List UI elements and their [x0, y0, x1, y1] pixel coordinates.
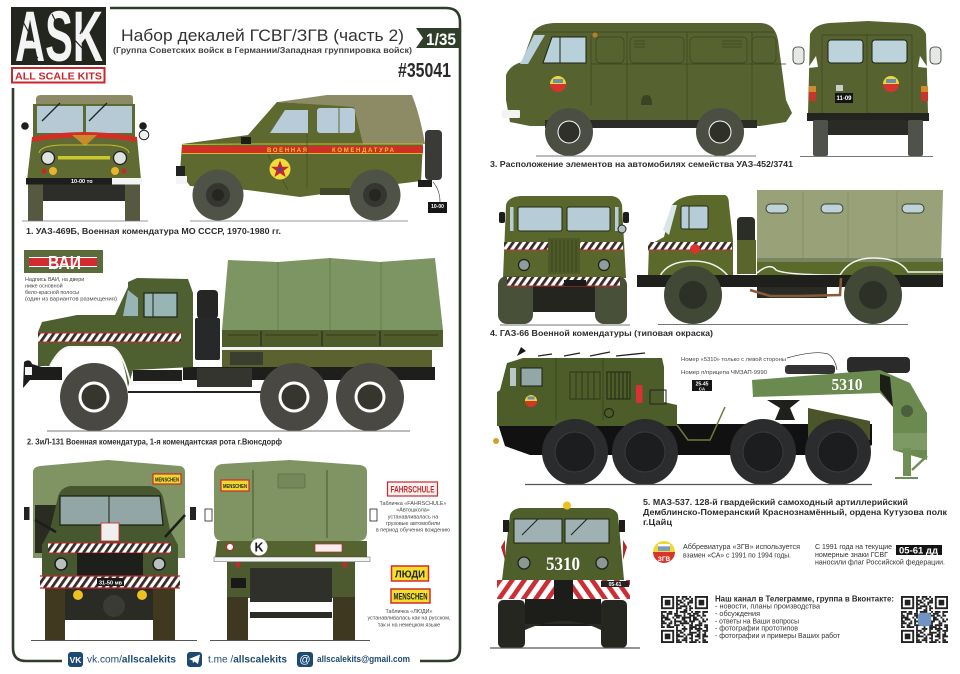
note: VAI: бело-красной полосы	[25, 289, 79, 296]
Telegram and VK text: - фотографии и примеры Ваших работ	[715, 632, 841, 640]
title: Набор декалей ГСВГ/ЗГВ (часть 2)	[121, 27, 404, 45]
sign: MENSCHEN: MENSCHEN	[394, 592, 428, 602]
vehicle 4: GAZ-66 front view	[498, 196, 630, 325]
link: email: allscalekits@gmail.com	[317, 654, 410, 664]
note: VAI: ниже основной	[25, 282, 63, 290]
QR code: Telegram	[661, 597, 708, 642]
logo: ASK: ASK	[15, 0, 103, 77]
note: 1991 plates: номерные знаки ГСВГ	[815, 552, 888, 559]
vehicle 1: UAZ-469 side view: 10-00	[431, 204, 444, 210]
caption 5: 5. МАЗ-537. 128-й гвардейский самоходный артиллерийский	[643, 497, 908, 507]
note: 1991 plates	[815, 544, 945, 566]
vehicle 1: UAZ-469 front view: 10-00 то	[71, 179, 93, 185]
icon: email: @	[299, 654, 311, 666]
note: 1991 plates: наносили флаг Российской федерации.	[815, 558, 945, 566]
vehicle 3: UAZ-452 rear view	[793, 21, 941, 156]
sign: VAI: ВАИ	[48, 253, 81, 273]
caption 1: 1. УАЗ-469Б, Военная комендатура МО СССР, 1970-1980 гг.	[26, 226, 281, 236]
note: VAI: Надпись ВАИ, на двери	[25, 277, 84, 283]
vehicle 2: ZIL-131 front view: MENSCHEN	[155, 478, 179, 484]
note: people sign	[368, 609, 451, 628]
vehicle 5: MAZ-537 front view: 5310	[546, 554, 580, 575]
note: number on left side	[681, 353, 837, 370]
caption 5: г.Цайц	[643, 517, 673, 527]
subtitle: (Группа Советских войск в Германии/Западная группировка войск)	[113, 45, 412, 55]
note: FAHRSCHULE	[376, 501, 450, 534]
sign: people: ЛЮДИ	[395, 568, 425, 580]
icon: ZGV roundel	[653, 541, 675, 563]
vehicle 3: UAZ-452 side view	[502, 23, 792, 156]
caption 4: 4. ГАЗ-66 Военной комендатуры (типовая окраска)	[490, 328, 713, 338]
note: FAHRSCHULE: устанавливалась на	[388, 514, 438, 520]
note: ZGV abbreviation: Аббревиатура «ЗГВ» используется	[683, 543, 800, 551]
vehicle 2: ZIL-131 front view	[24, 460, 197, 640]
note: FAHRSCHULE: в период обучения вождению	[376, 528, 450, 534]
link: VK: vk.com/allscalekits	[87, 654, 176, 666]
Telegram and VK text	[715, 594, 894, 640]
vehicle 2: ZIL-131 rear view	[205, 460, 377, 640]
vehicle 4: GAZ-66 side view	[637, 190, 943, 324]
icon: red star roundel	[270, 158, 290, 180]
note: number on left side: Номер «5310» только с левой стороны	[681, 356, 786, 363]
icon: Telegram	[187, 652, 202, 667]
scale flag 1/35	[416, 28, 461, 49]
vehicle 3: UAZ-452 rear view: 11-09	[836, 96, 852, 102]
plate: trailer	[692, 380, 712, 392]
caption 5: Демблинско-Померанский Краснознамённый, ордена Кутузова полк	[643, 507, 948, 517]
QR code: VK	[901, 597, 948, 642]
Telegram and VK text: - фотографии прототипов	[715, 626, 798, 632]
vehicle 2: ZIL-131 side view	[23, 258, 443, 431]
icon: email	[297, 652, 313, 667]
footer: social links	[68, 652, 410, 667]
plate: trailer: СА	[699, 386, 706, 392]
icon: ZGV roundel: ЗГВ	[658, 556, 671, 563]
caption 3: 3. Расположение элементов на автомобилях семейства УАЗ-452/3741	[490, 159, 793, 169]
logo: ASK: ALL SCALE KITS	[15, 72, 102, 82]
vehicle 1: UAZ-469 side view: КОМЕНДАТУРА	[332, 148, 395, 154]
icon: ZGV roundel rear	[883, 76, 899, 92]
vehicle 5: MAZ-537 front view: 05-61	[609, 582, 622, 588]
icon: VK	[68, 652, 83, 667]
vehicle 2: ZIL-131 front view: 31-50 мв	[99, 580, 123, 586]
note: people sign: Табличка «ЛЮДИ»	[385, 609, 433, 615]
vehicle 2: ZIL-131 rear view: MENSCHEN	[223, 484, 247, 490]
note: people sign: так и на немецком языке	[378, 622, 440, 628]
note: FAHRSCHULE: грузовые автомобили	[386, 521, 440, 527]
note: VAI	[25, 277, 117, 302]
plate: 05-61: 05-61 дд	[899, 546, 938, 557]
icon: VK: VK	[70, 655, 82, 665]
Telegram and VK text: - ответы на Ваши вопросы	[715, 618, 799, 626]
caption 5	[643, 497, 948, 527]
Telegram and VK text: Наш канал в Телеграмме, группа в Вконтакте:	[715, 594, 894, 604]
caption 2: 2. ЗиЛ-131 Военная комендатура, 1-я комендантская рота г.Вюнсдорф	[27, 436, 282, 446]
note: FAHRSCHULE: Табличка «FAHRSCHULE»	[379, 501, 447, 507]
product number: #35041	[398, 60, 451, 82]
vehicle 2: ZIL-131 rear view: K	[254, 540, 264, 554]
sign: MENSCHEN	[391, 589, 430, 603]
sign: FAHRSCHULE	[388, 482, 438, 496]
note: 1991 plates: С 1991 года на текущие	[815, 544, 892, 551]
Telegram and VK text: - новости, планы производства	[715, 604, 820, 610]
sign: VAI	[24, 250, 103, 273]
note: trailer number: Номер п/прицепа ЧМЗАП-9990	[681, 370, 767, 376]
vehicle 5: MAZ-537 side view	[493, 347, 927, 485]
vehicle 1: UAZ-469 front view	[21, 95, 149, 221]
icon: ZGV roundel MAZ	[525, 395, 537, 407]
logo: ASK	[11, 0, 106, 82]
vehicle 1: UAZ-469 side view	[176, 95, 447, 221]
link: Telegram: t.me /allscalekits	[208, 654, 287, 666]
icon: ZGV roundel side	[550, 76, 566, 92]
note: VAI: (один из вариантов размещения)	[25, 296, 117, 302]
vehicle 5: MAZ-537 side view: 5310	[832, 375, 862, 394]
Telegram and VK text: - обсуждения	[715, 610, 760, 618]
note: people sign: устанавливалась как на русском,	[368, 616, 451, 622]
vehicle 1: UAZ-469 side view: ВОЕННАЯ	[267, 148, 307, 154]
plate: trailer: 25-45	[696, 382, 709, 388]
vehicle 5: MAZ-537 front view	[490, 502, 640, 648]
scale flag 1/35: 1/35	[426, 30, 456, 49]
sign: FAHRSCHULE: FAHRSCHULE	[390, 484, 434, 494]
note: FAHRSCHULE: «Автошкола»	[396, 508, 430, 514]
note: ZGV abbreviation: взамен «СА» с 1991 по 1994 годы.	[683, 552, 791, 560]
page frame	[13, 8, 460, 661]
note: ZGV abbreviation	[683, 543, 800, 560]
